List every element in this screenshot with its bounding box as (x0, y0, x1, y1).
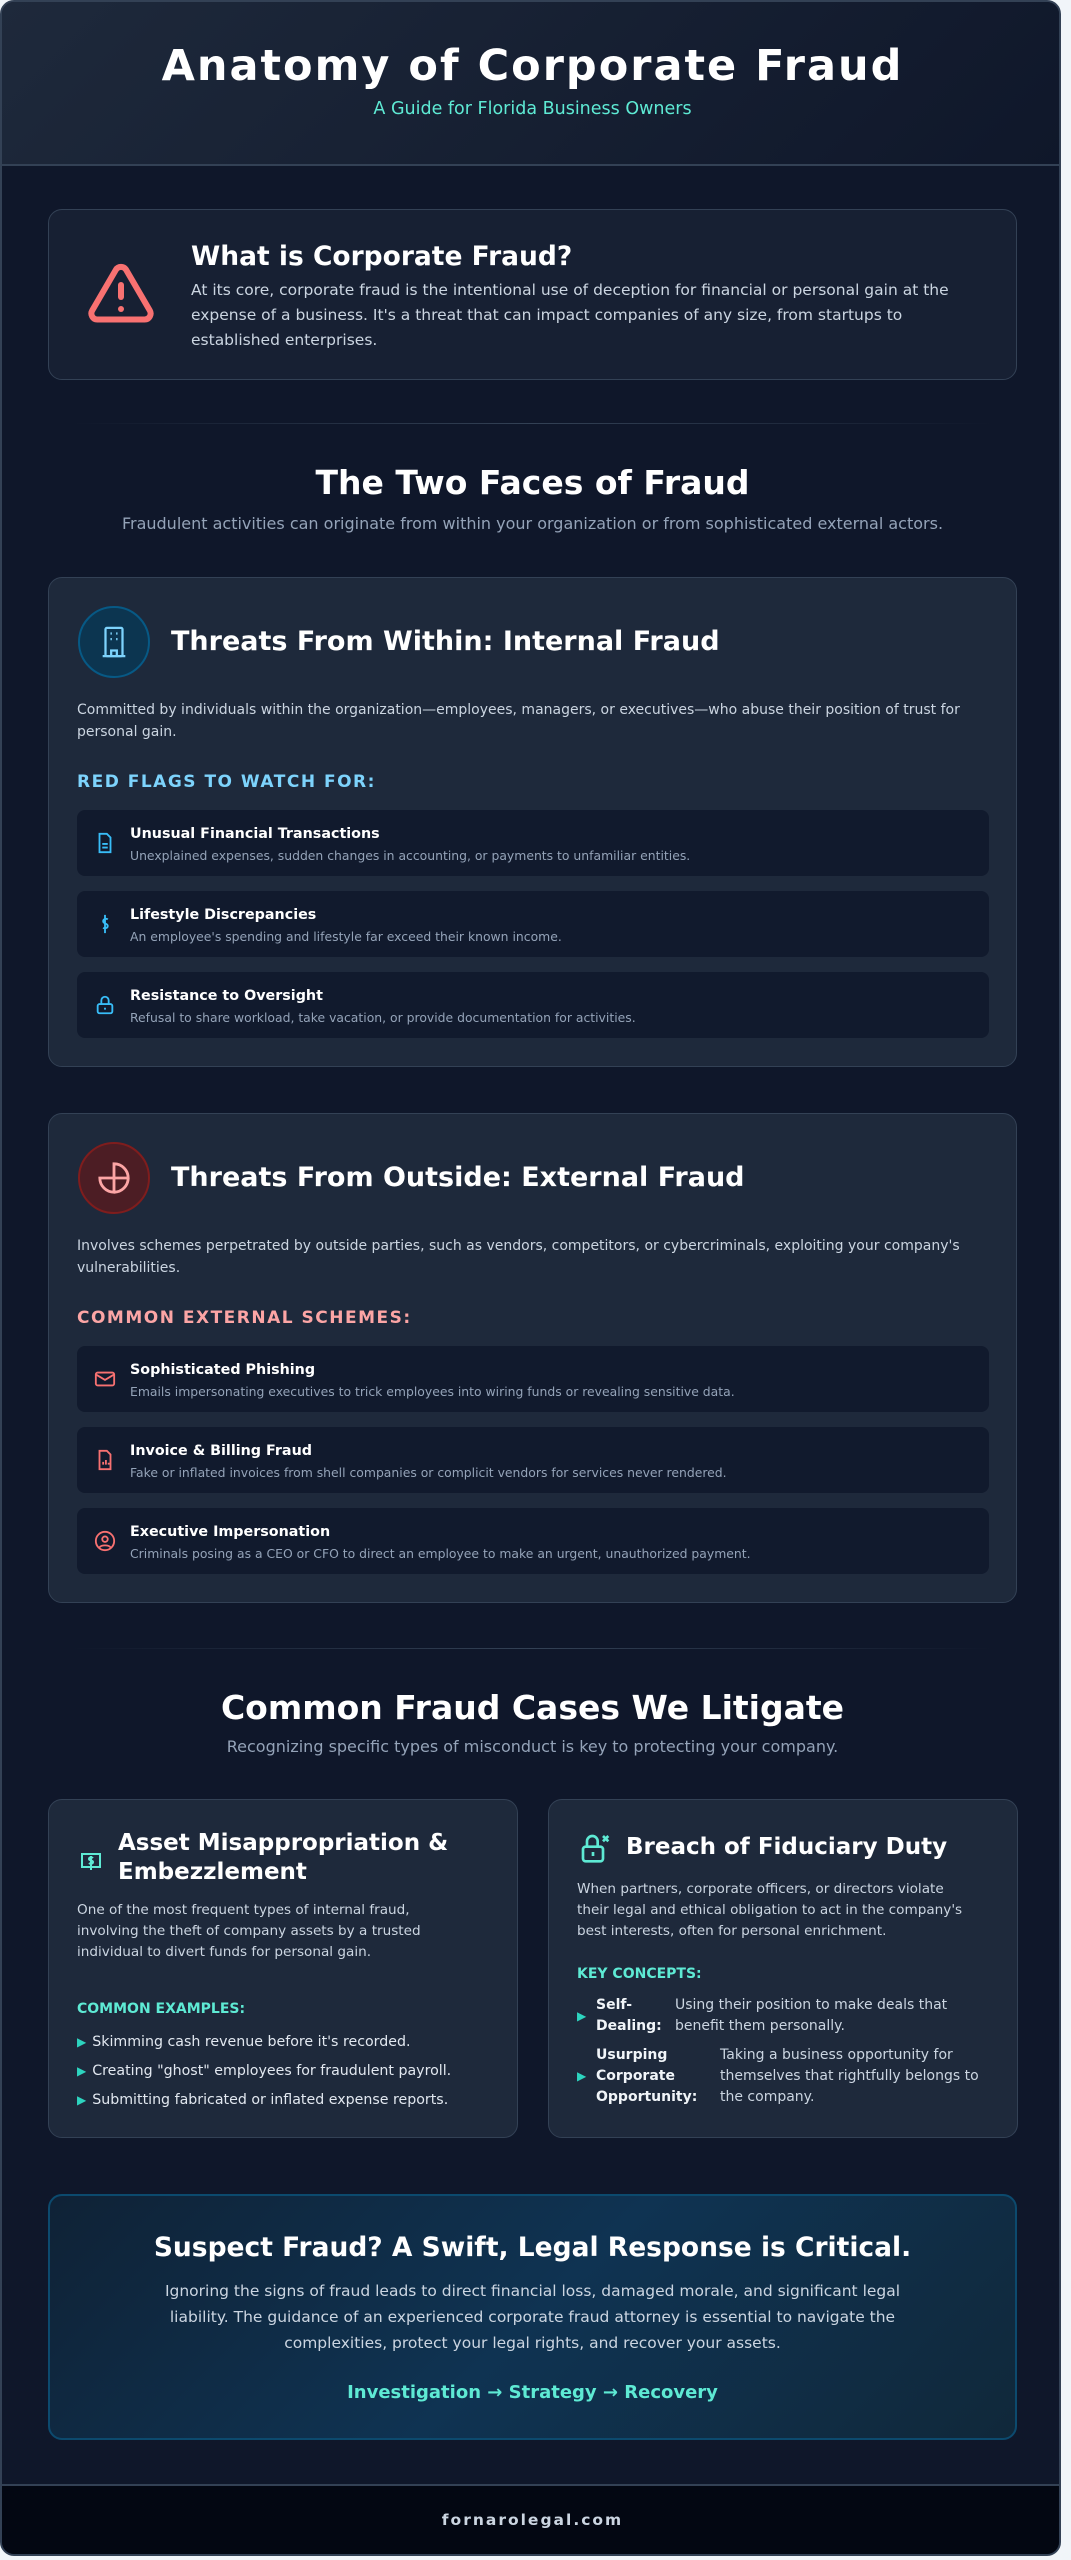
heading: What is Corporate Fraud? (191, 241, 572, 272)
item: oversight: Resistance to Oversight (130, 988, 323, 1004)
header (2, 2, 1063, 166)
list: examples (77, 2034, 451, 2108)
item: unusual transactions: Unexplained expenses, sudden changes in accounting, or payments to unfamiliar entities. (130, 848, 690, 863)
item: lifestyle: An employee's spending and lifestyle far exceed their known income. (130, 929, 562, 944)
item: invoice: Invoice & Billing Fraud (130, 1443, 312, 1459)
heading: Breach of Fiduciary Duty (626, 1834, 947, 1860)
icon: pie (78, 1142, 150, 1214)
list: concepts: Using their position to make deals that benefit them personally. (675, 1997, 947, 2034)
label: red flags: RED FLAGS TO WATCH FOR: (77, 772, 376, 792)
subtitle: A Guide for Florida Business Owners (373, 99, 692, 119)
heading: Asset Misappropriation & (118, 1830, 448, 1856)
section heading: two faces: The Two Faces of Fraud (316, 463, 749, 502)
list: concepts (577, 1997, 979, 2105)
item: invoice (77, 1427, 989, 1493)
item: unusual transactions: Unusual Financial Transactions (130, 826, 380, 842)
section heading: two faces (122, 463, 943, 533)
description: Involves schemes perpetrated by outside parties, such as vendors, competitors, or cybercriminals, exploiting your company's vulnerabilities. (77, 1238, 960, 1276)
section heading: common cases: Common Fraud Cases We Litigate (221, 1688, 844, 1727)
item: impersonation (77, 1508, 989, 1574)
item: lifestyle (77, 891, 989, 957)
title: Anatomy of Corporate Fraud (162, 41, 903, 91)
list: concepts: Corporate (596, 2068, 675, 2084)
list: examples: Skimming cash revenue before it's recorded. (92, 2034, 411, 2050)
list: concepts: ▶ (577, 2008, 586, 2022)
description: One of the most frequent types of internal fraud, involving the theft of company assets by a trusted individual to divert funds for personal gain. (77, 1902, 421, 1960)
label: common examples: COMMON EXAMPLES: (77, 2001, 245, 2017)
description: When partners, corporate officers, or directors violate their legal and ethical obligation to act in the company's best interests, often for personal enrichment. (577, 1881, 962, 1939)
cta heading: Suspect Fraud? A Swift, Legal Response is Critical. (154, 2232, 911, 2263)
section heading: two faces: Fraudulent activities can originate from within your organization or from sophisticated external actors. (122, 514, 943, 533)
item: oversight (77, 972, 989, 1038)
panel: internal fraud (48, 577, 1017, 1067)
item: unusual transactions (77, 810, 989, 876)
item: phishing (77, 1346, 989, 1412)
callout: cta (48, 2194, 1017, 2440)
list: examples: Submitting fabricated or inflated expense reports. (92, 2092, 448, 2108)
panel: asset misappropriation (48, 1799, 518, 2138)
list: examples: Creating "ghost" employees for fraudulent payroll. (92, 2063, 451, 2079)
process flow: Investigation → Strategy → Recovery (347, 2382, 718, 2403)
item: invoice: Fake or inflated invoices from shell companies or complicit vendors for services never rendered. (130, 1465, 727, 1480)
label: external schemes: COMMON EXTERNAL SCHEMES: (77, 1308, 412, 1328)
list: concepts: Taking a business opportunity for themselves that rightfully belongs to the company. (720, 2047, 979, 2105)
icon: building (78, 606, 150, 678)
description: Committed by individuals within the organization—employees, managers, or executives—who abuse their position of trust for personal gain. (77, 702, 960, 740)
icon: warning triangle (88, 264, 154, 322)
cta text: Ignoring the signs of fraud leads to direct financial loss, damaged morale, and significant legal liability. The guidance of an experienced corporate fraud attorney is essential to navigate the complexities, protect your legal rights, and recover your assets. (165, 2282, 900, 2352)
panel: what is corporate fraud (48, 209, 1017, 380)
icon: money (81, 1853, 101, 1870)
list: concepts: Dealing: (596, 2018, 662, 2034)
list: concepts: Usurping (596, 2047, 667, 2063)
heading (118, 1830, 448, 1885)
list: concepts: Self- (596, 1997, 632, 2013)
icon: broken lock (582, 1834, 610, 1863)
section heading: common cases (221, 1688, 844, 1756)
item: phishing: Emails impersonating executives to trick employees into wiring funds or revealing sensitive data. (130, 1384, 735, 1399)
heading: Threats From Within: Internal Fraud (171, 626, 720, 657)
item: lifestyle: Lifestyle Discrepancies (130, 907, 316, 923)
text block: At its core, corporate fraud is the intentional use of deception for financial or personal gain at the expense of a business. It's a threat that can impact companies of any size, from startups to established enterprises. (191, 281, 949, 349)
footer (2, 2484, 1063, 2558)
label: key concepts: KEY CONCEPTS: (577, 1966, 702, 1982)
item: impersonation: Executive Impersonation (130, 1524, 330, 1540)
section heading: common cases: Recognizing specific types of misconduct is key to protecting your company. (227, 1737, 838, 1756)
panel: breach of fiduciary duty (548, 1799, 1018, 2138)
item: phishing: Sophisticated Phishing (130, 1362, 315, 1378)
list: concepts: Opportunity: (596, 2089, 697, 2105)
heading: Embezzlement (118, 1859, 307, 1885)
footer: fornarolegal.com (442, 2511, 623, 2529)
item: oversight: Refusal to share workload, take vacation, or provide documentation for activities. (130, 1010, 636, 1025)
panel: external fraud (48, 1113, 1017, 1603)
heading: Threats From Outside: External Fraud (171, 1162, 745, 1193)
item: impersonation: Criminals posing as a CEO or CFO to direct an employee to make an urgent, unauthorized payment. (130, 1546, 751, 1561)
list: concepts: ▶ (577, 2069, 586, 2083)
